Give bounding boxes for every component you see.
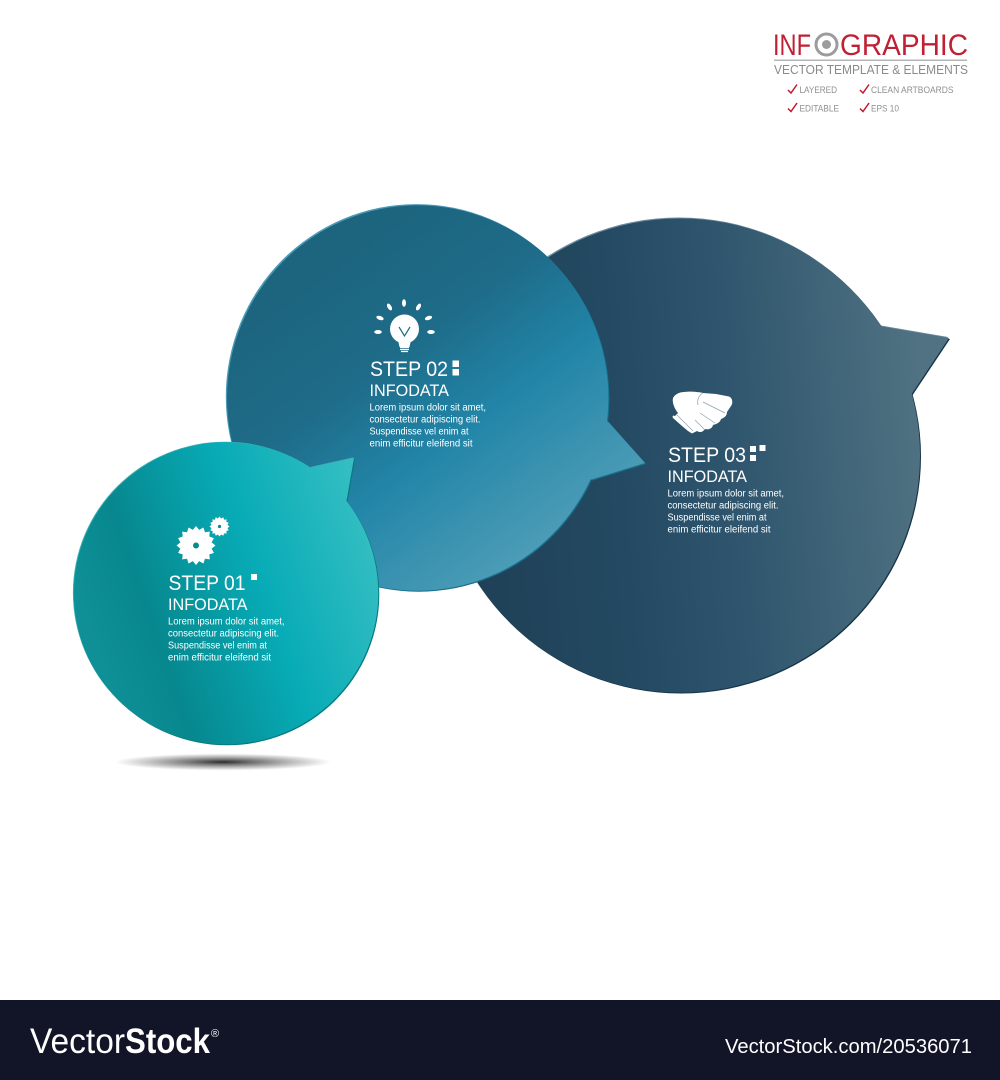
- footer logo: [30, 1022, 219, 1061]
- checklist: LAYERED: [800, 85, 837, 95]
- footer image id: VectorStock.com/20536071: [725, 1036, 972, 1058]
- icon: gears: [176, 516, 230, 565]
- panel: step 03 bubble: [439, 218, 950, 694]
- footer logo: Vector: [30, 1022, 125, 1061]
- subheading: infodata: INFODATA: [668, 467, 748, 486]
- text block: Suspendisse vel enim at: [668, 512, 767, 524]
- panel: step 01 bubble: [73, 442, 379, 745]
- panel: step 02 bubble: [226, 204, 646, 592]
- checklist: [788, 84, 954, 114]
- checklist: CLEAN ARTBOARDS: [871, 85, 954, 95]
- text block: [668, 488, 784, 536]
- step marker squares: [750, 445, 766, 461]
- logo subtitle: VECTOR TEMPLATE & ELEMENTS: [774, 63, 968, 77]
- text block: [168, 616, 284, 664]
- text block: Lorem ipsum dolor sit amet,: [370, 402, 486, 414]
- text block: Suspendisse vel enim at: [168, 640, 267, 652]
- step marker square: [251, 574, 257, 580]
- text block: [370, 402, 486, 450]
- text block: Lorem ipsum dolor sit amet,: [668, 488, 784, 500]
- text block: enim efficitur eleifend sit: [668, 524, 771, 536]
- subheading: infodata: INFODATA: [168, 595, 248, 614]
- text block: enim efficitur eleifend sit: [370, 438, 473, 450]
- logo block: infographic vector template: [773, 29, 968, 114]
- text block: consectetur adipiscing elit.: [370, 414, 480, 426]
- drop shadow under step 01: [115, 754, 331, 770]
- heading: step 03: STEP 03: [668, 443, 746, 467]
- footer logo: Stock: [125, 1022, 210, 1061]
- text block: consectetur adipiscing elit.: [168, 628, 279, 640]
- heading: step 01: STEP 01: [168, 571, 246, 595]
- text block: consectetur adipiscing elit.: [668, 500, 778, 512]
- checklist: EPS 10: [871, 104, 899, 114]
- checklist: EDITABLE: [800, 104, 839, 114]
- logo title: [773, 29, 968, 62]
- text block: Lorem ipsum dolor sit amet,: [168, 616, 284, 628]
- step marker squares: [452, 360, 459, 376]
- text block: enim efficitur eleifend sit: [168, 652, 271, 664]
- footer bar: [0, 1000, 1000, 1080]
- subheading: infodata: INFODATA: [370, 381, 450, 400]
- icon: light bulb: [374, 299, 435, 352]
- footer logo: ®: [211, 1028, 219, 1040]
- heading: step 02: STEP 02: [370, 357, 448, 381]
- logo title: INF: [773, 29, 811, 62]
- icon: handshake: [673, 392, 732, 434]
- logo title: GRAPHIC: [840, 29, 968, 62]
- text block: Suspendisse vel enim at: [370, 426, 469, 438]
